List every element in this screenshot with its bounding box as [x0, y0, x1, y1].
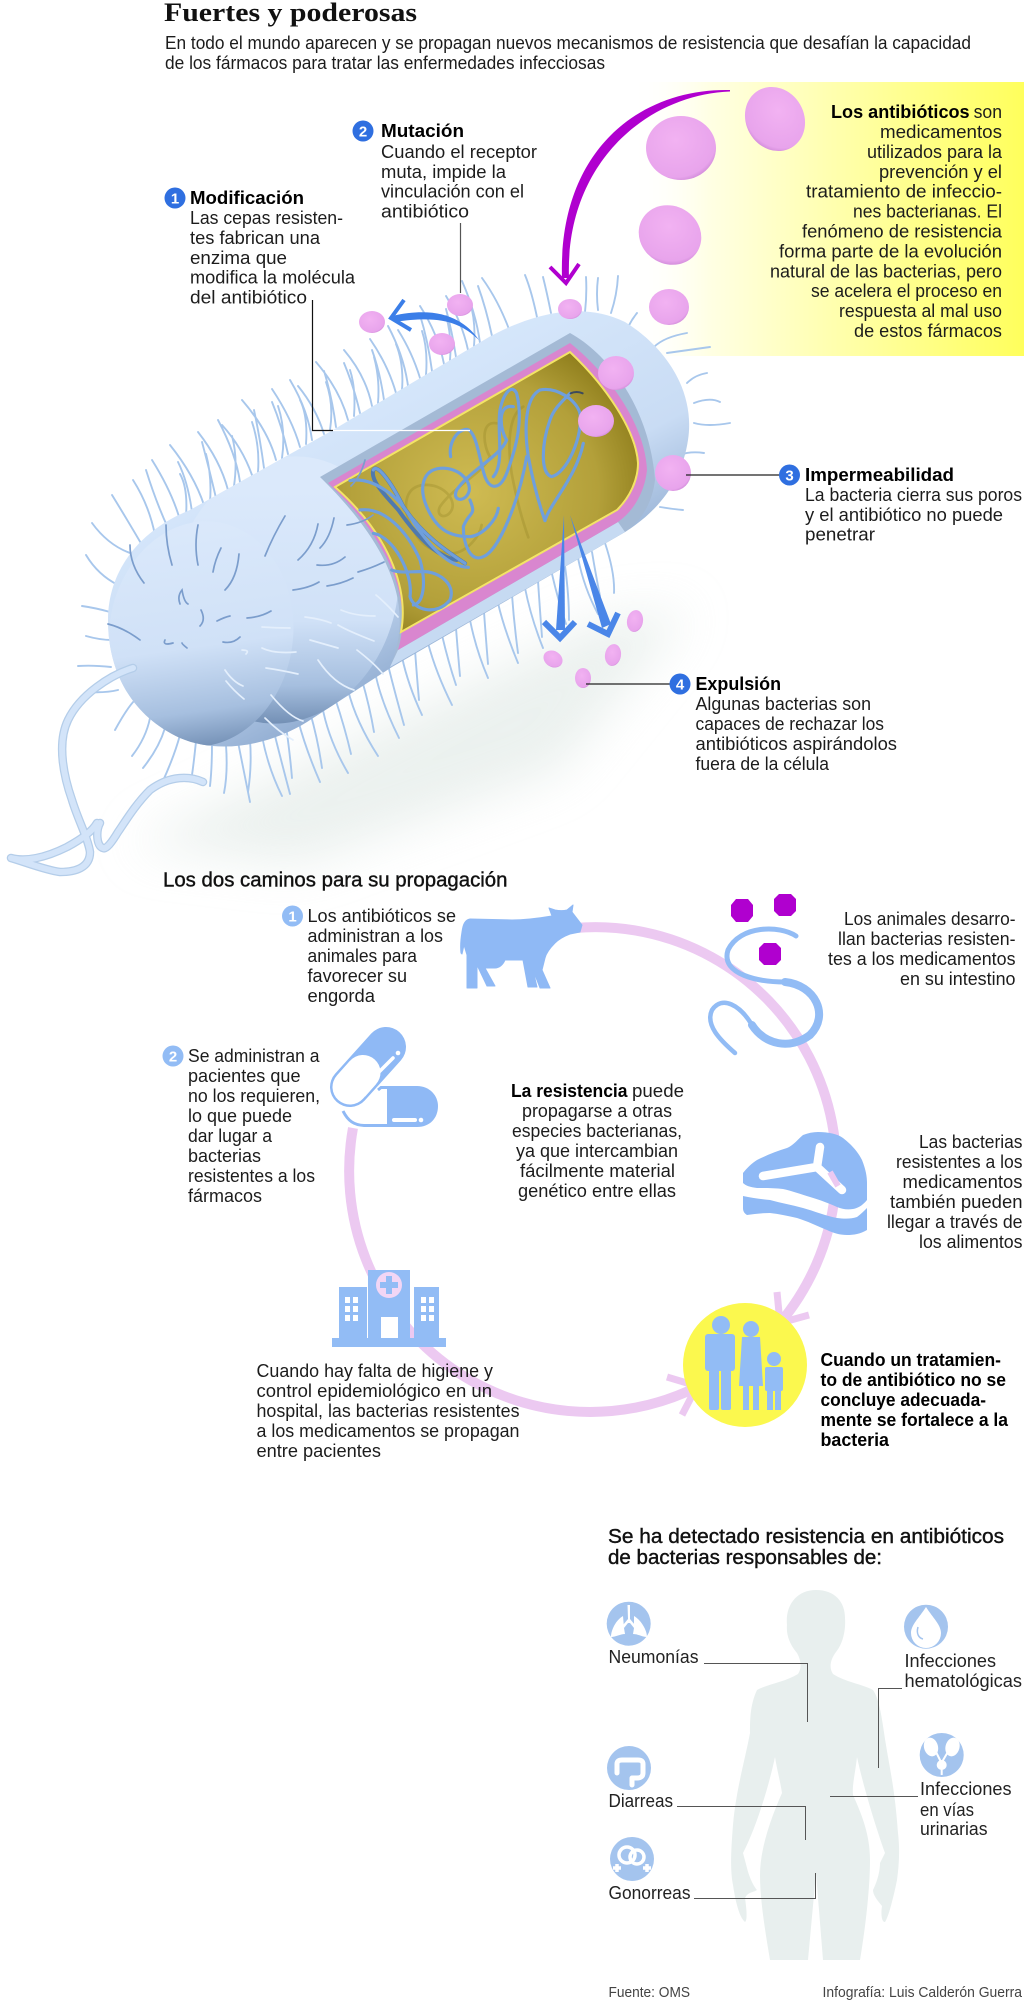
text: step 2: resistentes a los [188, 1166, 315, 1186]
text: step 1: favorecer su [308, 966, 407, 986]
text: step 1: engorda [308, 986, 376, 1006]
icon: pills [343, 1047, 438, 1127]
label 1: Modificación: modifica la molécula [190, 268, 356, 288]
heading: detected resistance [608, 1526, 1004, 1569]
text: hospital: hospital, las bacterias resistentes [256, 1401, 520, 1421]
text: step 1: administran a los [308, 926, 443, 946]
label 2: Mutación: vinculación con el [381, 182, 524, 202]
human silhouette [731, 1590, 899, 1960]
text: step 1: Los antibióticos se [308, 906, 456, 926]
callout: antibiotics definition: nes bacterianas. El [853, 202, 1002, 222]
subtitle: de los fármacos para tratar las enfermedades infecciosas [165, 53, 605, 73]
text: animals intestine: en su intestino [900, 969, 1016, 989]
labels: diseases: en vías [920, 1799, 974, 1820]
text: centre resistance: fácilmente material [520, 1161, 675, 1181]
text: hospital: Cuando hay falta de higiene y [256, 1361, 493, 1381]
panel: yellow background [630, 82, 1024, 356]
arrow: mutation blue [391, 300, 479, 340]
pili behind body [78, 275, 730, 802]
body leader lines [677, 1664, 918, 1898]
text: treatment warning: to de antibiótico no se [820, 1370, 1006, 1390]
arrow: magenta curved [550, 90, 730, 283]
cut: pink membrane [328, 343, 647, 650]
labels: diseases: urinarias [920, 1818, 988, 1839]
body segments [109, 458, 398, 746]
callout: antibiotics definition: son [974, 102, 1002, 122]
text: step 2: bacterias [188, 1146, 261, 1166]
text: centre resistance: puede [632, 1081, 684, 1101]
heading: propagation: Los dos caminos para su propagación [163, 868, 508, 892]
icon: blood drop [904, 1605, 948, 1649]
text: hospital: a los medicamentos se propagan [256, 1421, 520, 1441]
pili on body surface [108, 460, 384, 648]
label 4: Expulsión: 4 [676, 676, 685, 694]
icon: hospital [332, 1270, 446, 1347]
icon: cow [461, 905, 582, 988]
text: step 2: Se administran a [188, 1046, 320, 1066]
callout: antibiotics definition: prevención y el [879, 162, 1002, 182]
chromosome strands [373, 469, 465, 563]
label 4: Expulsión: fuera de la célula [696, 754, 830, 774]
text: step 2: lo que puede [188, 1106, 292, 1126]
icon: kidneys [920, 1733, 964, 1777]
text: food: llegar a través de [887, 1212, 1022, 1232]
label 4: Expulsión: antibióticos aspirándolos [696, 734, 897, 754]
text: hospital: entre pacientes [256, 1441, 381, 1461]
icon: family on yellow [683, 1303, 807, 1427]
label 4: Expulsión: capaces de rechazar los [696, 714, 884, 734]
text: centre resistance: especies bacterianas, [512, 1121, 682, 1141]
callout: antibiotics definition: se acelera el proceso en [811, 281, 1002, 301]
illustration: bacterium [11, 275, 730, 872]
callout: antibiotics definition: de estos fármacos [854, 321, 1002, 341]
text: hospital [256, 1361, 520, 1461]
text: food: también pueden [890, 1192, 1022, 1212]
labels: diseases: Neumonías [608, 1646, 698, 1667]
heading: detected resistance: de bacterias responsables de: [608, 1547, 882, 1569]
label 4: Expulsión: Algunas bacterias son [696, 694, 871, 714]
text: animals intestine: Los animales desarro- [844, 909, 1016, 929]
label 1: Modificación: Las cepas resisten- [190, 208, 343, 228]
text: treatment warning: mente se fortalece a la [820, 1410, 1009, 1430]
label 2: Mutación [352, 120, 537, 222]
text: step 2: pacientes que [188, 1066, 300, 1086]
icon: bacteria dots [731, 894, 796, 965]
label 4: Expulsión: Expulsión [696, 674, 781, 694]
icon: gonorrhea [610, 1837, 654, 1881]
text: food: Las bacterias [919, 1132, 1022, 1152]
label 3: Impermeabilidad: La bacteria cierra sus poros [805, 485, 1022, 505]
text: food: los alimentos [919, 1232, 1022, 1252]
callout: antibiotics definition: utilizados para la [867, 142, 1003, 162]
cycle diagram ring [349, 927, 836, 1415]
label 1: Modificación: tes fabrican una [190, 228, 321, 248]
labels: diseases: Infecciones [920, 1778, 1012, 1799]
callout: antibiotics definition: Los antibióticos [831, 102, 970, 122]
text: centre resistance: propagarse a otras [522, 1101, 672, 1121]
antibiotic molecules [359, 76, 817, 688]
text: animals intestine: tes a los medicamentos [828, 949, 1016, 969]
text: treatment warning: concluye adecuada- [820, 1390, 986, 1410]
text: step 2: no los requieren, [188, 1086, 320, 1106]
labels: diseases: Gonorreas [608, 1882, 690, 1903]
source credits: Fuente: OMS [608, 1984, 690, 2001]
icon: lungs [607, 1602, 651, 1646]
label 1: Modificación: 1 [171, 190, 179, 208]
shadow under bacterium [130, 610, 690, 865]
text: food: medicamentos [902, 1172, 1022, 1192]
labels: diseases: hematológicas [904, 1670, 1022, 1691]
label 1: Modificación: del antibiótico [190, 288, 307, 308]
text: centre resistance [511, 1081, 684, 1201]
text: hospital: control epidemiológico en un [256, 1381, 492, 1401]
source credits [608, 1984, 1023, 2001]
labels: diseases: Diarreas [608, 1790, 673, 1811]
label 3: Impermeabilidad: y el antibiótico no puede [805, 505, 1003, 525]
text: step 2 [162, 1046, 320, 1206]
label 3: Impermeabilidad: penetrar [805, 524, 875, 544]
text: food: resistentes a los [896, 1152, 1022, 1172]
text: step 2: fármacos [188, 1186, 262, 1206]
cut: outer rim [320, 333, 655, 667]
text: animals intestine: llan bacterias resisten- [838, 929, 1016, 949]
labels: diseases [608, 1646, 1022, 1903]
icon: intestine [710, 929, 819, 1053]
heading: detected resistance: Se ha detectado resistencia en antibióticos [608, 1526, 1004, 1548]
leader lines [312, 223, 781, 684]
subtitle [165, 33, 971, 73]
cut: olive interior [335, 352, 638, 632]
icon: meat [743, 1132, 867, 1235]
callout: antibiotics definition: medicamentos [880, 122, 1002, 142]
text: centre resistance: genético entre ellas [518, 1181, 676, 1201]
label 3: Impermeabilidad [779, 464, 1022, 544]
text: step 2: dar lugar a [188, 1126, 273, 1146]
text: centre resistance: ya que intercambian [516, 1141, 678, 1161]
chromosome shadow [406, 407, 528, 553]
text: animals intestine [828, 909, 1016, 989]
label 2: Mutación: antibiótico [381, 202, 469, 222]
text: step 2: 2 [169, 1048, 177, 1066]
label 1: Modificación: Modificación [190, 188, 304, 208]
labels: diseases: Infecciones [904, 1650, 996, 1671]
callout: antibiotics definition [770, 102, 1003, 341]
label 1: Modificación: enzima que [190, 248, 287, 268]
label 1: Modificación [164, 188, 356, 308]
chromosome [350, 389, 583, 610]
text: treatment warning: Cuando un tratamien- [820, 1350, 1001, 1370]
callout: antibiotics definition: tratamiento de infeccio- [806, 182, 1002, 202]
icon: intestines [607, 1746, 651, 1790]
arrows: expulsion blue [544, 515, 618, 638]
label 2: Mutación: 2 [359, 124, 367, 140]
text: treatment warning: bacteria [820, 1430, 890, 1450]
label 3: Impermeabilidad: Impermeabilidad [805, 465, 954, 485]
text: centre resistance: La resistencia [511, 1081, 628, 1101]
label 4: Expulsión [670, 674, 897, 774]
body capsule [108, 311, 689, 747]
callout: antibiotics definition: forma parte de la evolución [779, 242, 1002, 262]
cut: lower light rim [390, 522, 625, 667]
callout: antibiotics definition: respuesta al mal uso [839, 301, 1002, 321]
label 3: Impermeabilidad: 3 [785, 468, 794, 484]
text: step 1 [282, 906, 456, 1006]
label 2: Mutación: muta, impide la [381, 162, 507, 182]
label 2: Mutación: Mutación [381, 121, 464, 141]
callout: antibiotics definition: fenómeno de resistencia [802, 222, 1003, 242]
callout: antibiotics definition: natural de las bacterias, pero [770, 262, 1002, 282]
subtitle: En todo el mundo aparecen y se propagan nuevos mecanismos de resistencia que desafían la capacidad [165, 33, 971, 53]
text: step 1: 1 [288, 908, 297, 926]
text: step 1: animales para [308, 946, 418, 966]
text: treatment warning [820, 1350, 1009, 1450]
text: food [887, 1132, 1022, 1252]
flagellum [11, 668, 203, 872]
label 2: Mutación: Cuando el receptor [381, 142, 537, 162]
